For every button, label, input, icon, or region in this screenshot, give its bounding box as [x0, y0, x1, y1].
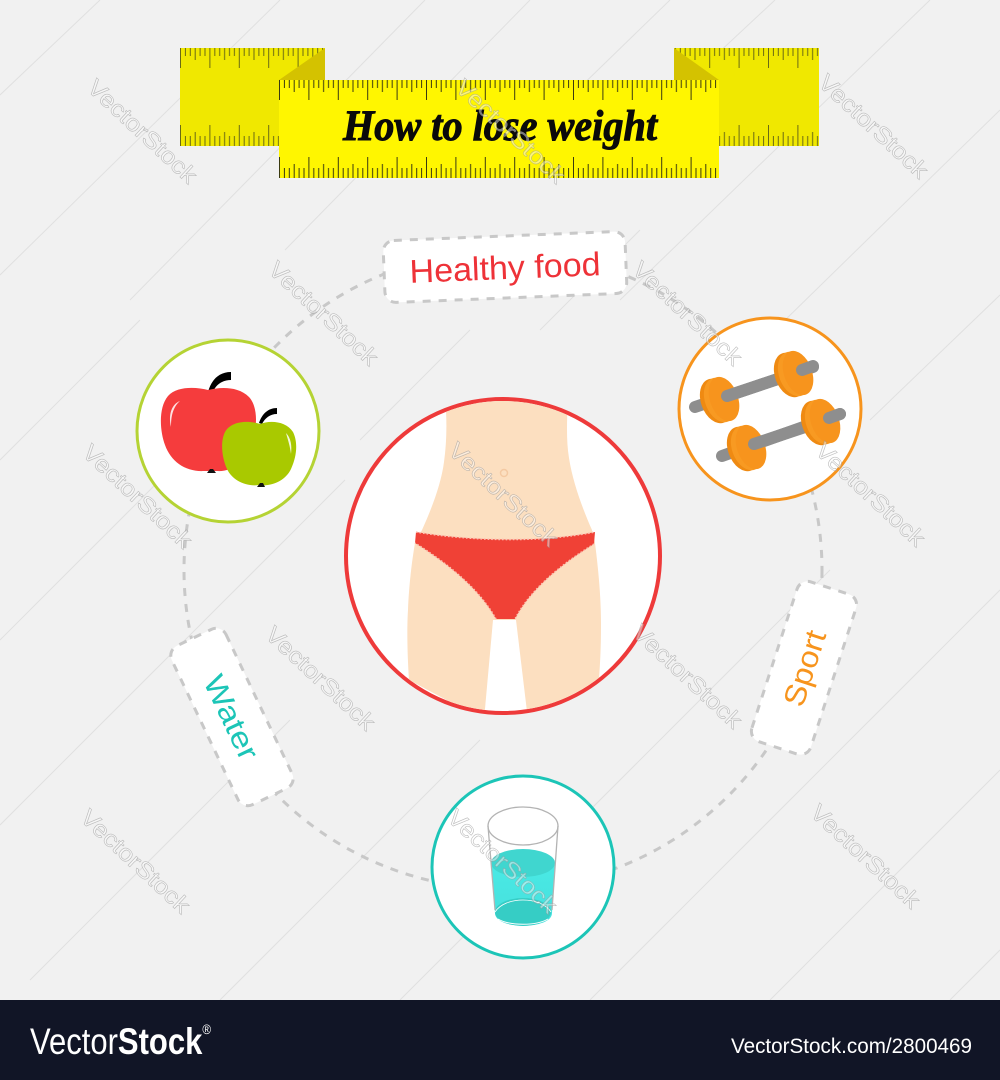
- water circle: [432, 776, 614, 958]
- apples circle: [137, 340, 319, 522]
- label: Water: [167, 625, 297, 809]
- watermarks: [75, 69, 934, 919]
- label: Healthy food: Healthy food: [409, 245, 601, 290]
- central body circle: [346, 395, 660, 720]
- icon: red apple: [161, 372, 256, 473]
- tape left tail: [180, 48, 325, 146]
- watermarks: VectorStock: [627, 619, 748, 734]
- watermarks: VectorStock: [260, 621, 381, 736]
- title ribbon: measuring tape: [180, 48, 819, 178]
- dashed connecting ring: [184, 251, 822, 889]
- tape front band: [279, 80, 719, 178]
- footer bar: [0, 1000, 1000, 1080]
- label: Healthy food: [383, 231, 627, 303]
- watermarks: VectorStock: [442, 804, 563, 919]
- watermarks: VectorStock: [77, 439, 198, 554]
- watermarks: VectorStock: [263, 256, 384, 371]
- label: Sport: [749, 579, 859, 757]
- watermarks: VectorStock: [805, 799, 926, 914]
- title: How to lose weight: [342, 103, 659, 150]
- footer logo: VectorStock: [30, 1021, 219, 1062]
- watermarks: VectorStock: [810, 437, 931, 552]
- footer image id: VectorStock.com/2800469: [731, 1035, 972, 1058]
- footer logo: ®: [202, 1021, 212, 1037]
- icon: glass of water: [488, 807, 558, 926]
- icon: lower dumbbell: [721, 395, 846, 476]
- icon: green apple: [222, 408, 296, 487]
- watermarks: VectorStock: [813, 69, 934, 184]
- watermarks: VectorStock: [443, 437, 564, 552]
- tape right tail: [674, 48, 819, 146]
- icon: upper dumbbell: [694, 347, 819, 428]
- dumbbells circle: [679, 318, 861, 500]
- watermarks: VectorStock: [75, 804, 196, 919]
- watermarks: VectorStock: [627, 256, 748, 371]
- label: Water: Water: [196, 670, 265, 765]
- watermarks: VectorStock: [450, 74, 571, 189]
- label: Sport: Sport: [778, 626, 833, 711]
- navel: [500, 470, 508, 476]
- watermarks: VectorStock: [82, 74, 203, 189]
- red briefs: [415, 532, 595, 619]
- body silhouette: [407, 395, 601, 720]
